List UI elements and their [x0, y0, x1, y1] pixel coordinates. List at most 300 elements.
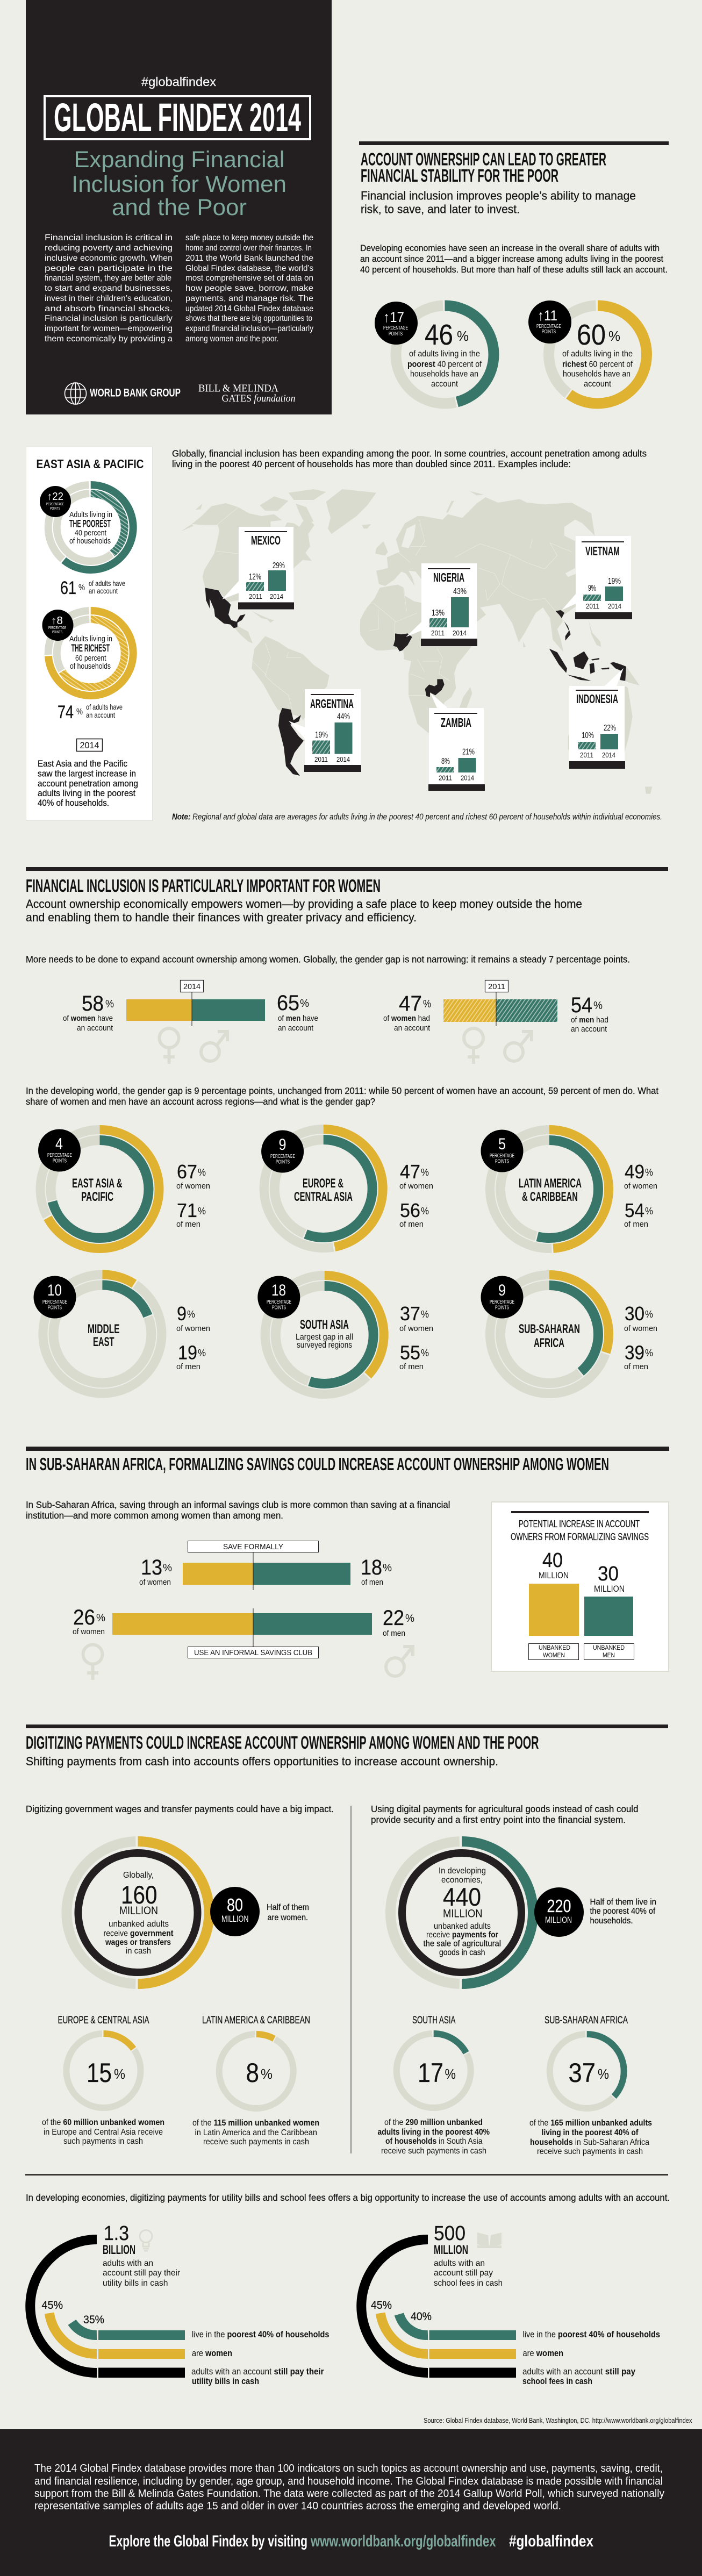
- stat: 60 percent: richest 60 percent of: [562, 360, 633, 369]
- donut label: richest: [69, 634, 112, 671]
- donut label: poorest: THE POOREST: [69, 518, 111, 530]
- caption: adults living in the poorest 40%: [377, 2128, 490, 2137]
- stats: %: [187, 1309, 195, 1320]
- legend labels: live in the poorest 40% of households: [522, 2330, 660, 2339]
- value: %: [261, 2066, 273, 2082]
- region name: EAST: [93, 1335, 114, 1349]
- bars: [112, 1608, 372, 1647]
- label: save formally: [188, 1541, 318, 1552]
- callout: Vietnam: 19%: [608, 577, 621, 586]
- call to action: #globalfindex: [509, 2532, 593, 2550]
- region name: SOUTH ASIA: [300, 1318, 349, 1332]
- caption: [42, 2118, 164, 2146]
- badge: 9 percentage points: PERCENTAGE: [270, 1154, 295, 1160]
- caption: receive such payments in cash: [381, 2146, 486, 2156]
- callout: Indonesia: [569, 668, 625, 769]
- bars: [429, 2330, 516, 2378]
- stat: 46 percent: households have an: [410, 370, 478, 378]
- call to action: Explore the Global Findex by visiting: [109, 2532, 307, 2550]
- stat text: 440 million: MILLION: [443, 1907, 483, 1920]
- stat: 74 percent: %: [76, 706, 83, 717]
- stat: 46 percent: [407, 319, 482, 389]
- stat: 60 percent: [562, 319, 633, 389]
- caption: [529, 2119, 652, 2156]
- stat text: 160 million: [103, 1871, 174, 1956]
- donut: East Asia and Pacific region: [38, 1129, 210, 1248]
- callout: Nigeria: [406, 563, 477, 646]
- callout: Nigeria: NIGERIA: [433, 570, 464, 584]
- value: [246, 2058, 273, 2088]
- stat: women 26: 26: [73, 1606, 95, 1629]
- stat: 1.3 billion: [103, 2222, 181, 2288]
- country shape: Mexico: [205, 588, 246, 628]
- region label: SOUTH ASIA: [412, 2015, 456, 2026]
- stats: of women: [624, 1324, 657, 1333]
- panel note: 40% of households.: [38, 798, 109, 808]
- callout: Argentina: 44%: [337, 712, 350, 721]
- value: %: [114, 2066, 125, 2082]
- region name: [296, 1318, 353, 1350]
- stat: women 26: %: [96, 1612, 105, 1624]
- value: 17: [418, 2058, 443, 2088]
- donut label: poorest: 40 percent: [75, 528, 107, 538]
- tag: unbanked women: [529, 1644, 578, 1660]
- year tag 2014: [76, 739, 102, 752]
- badge: up 11 percentage points: [528, 300, 571, 344]
- badge: 4 percentage points: POINTS: [53, 1158, 67, 1164]
- callout: Zambia: 2011: [439, 774, 452, 782]
- stat: women 13: 13: [141, 1556, 162, 1579]
- paragraph: savings: [26, 1499, 450, 1521]
- region name: EAST ASIA &: [72, 1176, 123, 1191]
- stats: 67: [177, 1161, 197, 1183]
- legend labels: adults with an account still pay: [522, 2367, 636, 2377]
- intro text column 1: Financial inclusion is particularly: [45, 314, 173, 323]
- stat: men 18: [361, 1556, 392, 1587]
- paragraph: gender gap: More needs to be done to expand account ownership among women. Globally, the gender gap is not narrowing: it remains a steady 7 percentage points.: [26, 954, 630, 964]
- intro text column 2: expand financial inclusion—particularly: [185, 324, 313, 333]
- paragraph: developing economies: 40 percent of households. But more than half of these adults still lack an account.: [360, 264, 668, 275]
- callout: Vietnam: 2011: [586, 602, 599, 610]
- intro: globally: [172, 448, 647, 469]
- stat: 60 percent: households have an: [563, 370, 631, 378]
- section rule: Sub-Saharan savings: [26, 1447, 669, 1451]
- stat: women 47: of women had: [383, 1014, 430, 1023]
- tag: unbanked men: [584, 1644, 634, 1660]
- stat: men 54: [571, 993, 608, 1034]
- callout: Indonesia: 2011: [580, 751, 593, 759]
- subheading: women: Account ownership economically empowers women—by providing a safe place to keep money outside the home: [26, 897, 582, 911]
- donut: Sub-Saharan Africa: [481, 1275, 657, 1393]
- callout: Zambia: ZAMBIA: [441, 715, 471, 729]
- stat: 46 percent: %: [457, 328, 469, 344]
- country shape: Vietnam: [555, 610, 571, 641]
- stat: women 58: %: [105, 998, 114, 1010]
- panel title: OWNERS FROM FORMALIZING SAVINGS: [511, 1532, 649, 1542]
- region name: [519, 1176, 582, 1204]
- title: GLOBAL FINDEX 2014: [54, 95, 301, 140]
- bar: unbanked women 40 million: MILLION: [539, 1570, 569, 1580]
- note: half poorest: the poorest 40% of: [590, 1907, 656, 1916]
- stats: [624, 1161, 657, 1229]
- callout: Nigeria: 43%: [453, 587, 467, 596]
- heading: women: FINANCIAL INCLUSION IS PARTICULARLY IMPORTANT FOR WOMEN: [26, 876, 381, 896]
- stat: men 18: 18: [361, 1556, 382, 1579]
- stat: 500 million: account still pay: [434, 2269, 493, 2278]
- badge: up 8: ↑8: [51, 615, 63, 627]
- donut: Latin America and Caribbean: [481, 1130, 657, 1248]
- caption: in Latin America and the Caribbean: [195, 2128, 317, 2137]
- panel: footer: [0, 2429, 702, 2576]
- badge: 18 percentage points: POINTS: [272, 1305, 286, 1311]
- intro text column 2: Global Findex database, the world’s: [185, 264, 313, 273]
- stats: 54: [625, 1199, 644, 1221]
- region name: AFRICA: [534, 1336, 564, 1350]
- bar: unbanked women 40 million: [529, 1549, 579, 1636]
- donut: Sub-Saharan Africa 37 percent: [529, 2015, 652, 2156]
- section rule: women: [26, 867, 668, 871]
- stats: %: [645, 1206, 653, 1217]
- badge: up 11 percentage points: PERCENTAGE: [536, 324, 561, 330]
- subheading: women: and enabling them to handle their finances with greater privacy and efficiency.: [26, 911, 417, 924]
- stats: 55: [400, 1342, 420, 1363]
- chart: school fees: [361, 2222, 660, 2386]
- paragraph: agricultural goods: Using digital payments for agricultural goods instead of cash could: [371, 1804, 639, 1814]
- caption: such payments in cash: [63, 2137, 143, 2146]
- paragraph: agricultural goods: provide security and a first entry point into the financial system.: [371, 1814, 626, 1825]
- stat text: 440 million: 440: [443, 1883, 481, 1911]
- bar chart: informal savings club: [73, 1606, 414, 1680]
- stat: 74 percent: of adults have: [86, 703, 123, 711]
- stats: [624, 1303, 657, 1371]
- stat: 46 percent: account: [431, 380, 458, 389]
- arcs and bars: [361, 2239, 428, 2373]
- intro text column 2: home and control over their finances. In: [185, 244, 312, 253]
- intro text column 2: [185, 233, 313, 344]
- badge: up 22: PERCENTAGE: [46, 502, 64, 506]
- note: half poorest: [590, 1898, 656, 1926]
- icon: book: [477, 2232, 502, 2248]
- caption: of the 60 million unbanked women: [42, 2118, 164, 2127]
- stats: 56: [400, 1199, 420, 1221]
- panel: intro dark: [26, 0, 332, 414]
- callout: Argentina: 19%: [315, 731, 328, 740]
- badge: 18 percentage points: PERCENTAGE: [267, 1299, 291, 1305]
- caption: of households in South Asia: [385, 2137, 483, 2146]
- stat: men 65: 65: [277, 991, 299, 1015]
- stat: women 13: of women: [139, 1578, 171, 1587]
- panel note: [38, 759, 138, 808]
- badge: 9 percentage points: 9: [498, 1282, 506, 1299]
- donut: 60 percent richest: [549, 305, 647, 403]
- intro text column 2: safe place to keep money outside the: [185, 233, 313, 242]
- callout: Argentina: ARGENTINA: [310, 697, 354, 711]
- bars 2011: [443, 992, 557, 1026]
- subheading: account ownership: risk, to save, and later to invest.: [361, 202, 520, 216]
- callout: Argentina: 2014: [336, 755, 350, 763]
- caption: of the 115 million unbanked women: [192, 2119, 319, 2128]
- value: 35 percent poorest: 35%: [83, 2314, 104, 2326]
- stat: men 65: an account: [278, 1024, 314, 1033]
- heading: account ownership: [361, 149, 606, 185]
- stat: 74 percent: [58, 702, 123, 722]
- subheading: digitizing: Shifting payments from cash into accounts offers opportunities to increase account ownership.: [26, 1755, 498, 1768]
- stats: %: [198, 1348, 206, 1358]
- value: 45 percent women: 45%: [42, 2299, 63, 2312]
- callout: Vietnam: 2014: [608, 602, 621, 610]
- icon: female symbol: [83, 1645, 102, 1680]
- region name: MIDDLE: [88, 1322, 119, 1336]
- bars 2014: [126, 992, 265, 1026]
- intro text column 1: inclusive economic growth. When: [45, 254, 173, 263]
- stats: of women: [176, 1182, 210, 1191]
- paragraph: agricultural goods: [371, 1804, 639, 1825]
- badge: 10 percentage points: POINTS: [48, 1305, 62, 1311]
- region name: [519, 1322, 580, 1350]
- stat: women 26: of women: [73, 1627, 105, 1636]
- donut label: poorest: Adults living in: [69, 510, 112, 519]
- callout: Mexico: 29%: [273, 561, 285, 570]
- badge: 5 percentage points: POINTS: [495, 1159, 509, 1164]
- caption: living in the poorest 40% of: [542, 2128, 639, 2137]
- intro text column 2: updated 2014 Global Findex database: [185, 304, 313, 313]
- stat: 60 percent: 60: [577, 319, 606, 351]
- stat: women 26: [73, 1606, 105, 1636]
- legend labels: adults with an account still pay their: [191, 2367, 324, 2377]
- stat: women 47: 47: [399, 992, 422, 1015]
- badge: 10 percentage points: PERCENTAGE: [42, 1299, 67, 1305]
- badge: 80 million: [210, 1887, 260, 1936]
- intro: globally: living in the poorest 40 percent of households has more than doubled since 2011. Examples include:: [172, 459, 571, 469]
- region name: [72, 1176, 123, 1204]
- caption: receive such payments in cash: [537, 2147, 643, 2156]
- tag: unbanked men: UNBANKED: [593, 1644, 625, 1651]
- stat: 60 percent: of adults living in the: [562, 349, 633, 359]
- tag 2014: 2014: [183, 982, 200, 991]
- call to action: [109, 2532, 593, 2550]
- stat: men 18: %: [383, 1562, 392, 1574]
- stat: 500 million: adults with an: [434, 2259, 485, 2268]
- stats: of women: [399, 1182, 433, 1191]
- callout: Indonesia: 2014: [602, 751, 615, 759]
- legend labels: [522, 2330, 660, 2386]
- icon: World Bank globe logo: [65, 383, 86, 404]
- stats: %: [421, 1206, 429, 1217]
- region name: SUB-SAHARAN: [519, 1322, 580, 1336]
- panel title: [511, 1519, 649, 1542]
- value: 37: [569, 2058, 596, 2088]
- legend labels: [191, 2330, 329, 2386]
- stats: [176, 1303, 210, 1371]
- value: 15: [87, 2058, 112, 2088]
- paragraph: developing world: [26, 1085, 658, 1107]
- badge: 10 percentage points: [33, 1276, 76, 1318]
- bar chart: save formally: [139, 1541, 392, 1590]
- region name: & CARIBBEAN: [522, 1190, 578, 1204]
- intro text column 1: [45, 233, 173, 344]
- bar: unbanked men 30 million: [584, 1563, 633, 1636]
- stats: 49: [625, 1161, 644, 1183]
- panel note: account penetration among: [38, 779, 138, 789]
- donut label: richest: Adults living in: [69, 634, 112, 643]
- call to action: www.worldbank.org/globalfindex: [310, 2532, 496, 2550]
- region name: LATIN AMERICA: [519, 1176, 582, 1191]
- Gates Foundation wordmark: GATES foundation: [221, 393, 296, 404]
- stat: 500 million: school fees in cash: [434, 2279, 503, 2288]
- stat: women 13: %: [163, 1562, 172, 1574]
- callout: Nigeria: 13%: [432, 609, 445, 618]
- stat: 46 percent: of adults living in the: [409, 349, 480, 359]
- note: half women: [267, 1903, 309, 1922]
- badge: 10 percentage points: 10: [47, 1282, 62, 1299]
- country shape: Zambia: [425, 679, 445, 697]
- subtitle: [71, 147, 286, 220]
- region label: LATIN AMERICA & CARIBBEAN: [202, 2015, 310, 2026]
- stats: 47: [400, 1161, 420, 1183]
- callout: Argentina: [289, 689, 361, 772]
- tag 2011: 2011: [488, 982, 505, 991]
- stat text: 160 million: 160: [121, 1880, 157, 1909]
- note: half poorest: households.: [590, 1916, 633, 1926]
- caption: in Europe and Central Asia receive: [44, 2128, 163, 2137]
- badge: 5 percentage points: 5: [498, 1135, 506, 1153]
- stat: 1.3 billion: utility bills in cash: [103, 2279, 168, 2288]
- intro text column 2: 2011 the World Bank launched the: [185, 254, 313, 263]
- panel note: adults living in the poorest: [38, 789, 135, 798]
- section rule: account ownership: [359, 141, 669, 145]
- stat: women 47: an account: [394, 1024, 431, 1033]
- legend labels: school fees in cash: [522, 2377, 592, 2386]
- world map: [181, 489, 652, 794]
- intro text column 1: to start and expand businesses,: [45, 284, 173, 293]
- stats: 9: [177, 1303, 187, 1325]
- badge: 80 million: MILLION: [221, 1914, 248, 1924]
- badge: 18 percentage points: [257, 1276, 300, 1318]
- icon: male symbol: [201, 1032, 227, 1061]
- stats: of men: [399, 1220, 424, 1229]
- icon: light bulb: [140, 2230, 152, 2251]
- caption: households in Sub-Saharan Africa: [530, 2138, 649, 2147]
- stat text: 440 million: unbanked adults: [434, 1922, 491, 1931]
- stat: men 22: of men: [383, 1629, 405, 1638]
- intro text column 2: payments, and manage risk. The: [185, 294, 313, 303]
- stats: 19: [178, 1342, 197, 1363]
- note: half women: Half of them: [267, 1903, 309, 1912]
- region name: CENTRAL ASIA: [294, 1190, 353, 1204]
- paragraph: utility bills and school fees: In developing economies, digitizing payments for utility bills and school fees offers a big opportunity to increase the use of accounts among adults with an account.: [26, 2192, 670, 2203]
- footer paragraph: [34, 2463, 664, 2512]
- panel: East Asia and Pacific: [26, 447, 153, 820]
- intro text column 2: how people save, borrow, make: [185, 284, 313, 293]
- stat text: 440 million: [424, 1866, 501, 1957]
- callout: Zambia: 21%: [462, 747, 475, 757]
- stats: of women: [399, 1324, 433, 1333]
- tag: unbanked men: MEN: [603, 1651, 615, 1659]
- label: save formally: SAVE FORMALLY: [223, 1542, 283, 1551]
- donut: richest 74 vs 66: [48, 611, 133, 696]
- stats: [399, 1303, 433, 1371]
- stat text: 160 million: unbanked adults: [109, 1920, 169, 1929]
- Gates Foundation wordmark: [198, 383, 296, 404]
- stat text: 160 million: MILLION: [119, 1905, 158, 1917]
- tag: unbanked women: WOMEN: [543, 1651, 565, 1659]
- callout: Vietnam: 9%: [588, 584, 596, 593]
- region name: surveyed regions: [297, 1341, 352, 1350]
- donut: Latin America and Caribbean 8 percent: [192, 2015, 319, 2146]
- donut: Europe and Central Asia 15 percent: [42, 2015, 164, 2146]
- bar chart: 2014 gender: [63, 981, 318, 1064]
- badge: up 11 percentage points: ↑11: [538, 307, 557, 324]
- country shape: Nigeria: [393, 633, 412, 652]
- stat: 60 percent: account: [584, 380, 611, 389]
- stats: %: [421, 1309, 429, 1320]
- intro text column 1: and absorb financial shocks.: [45, 304, 173, 313]
- tag 2014: [181, 981, 203, 992]
- intro text column 1: them economically by providing a: [45, 334, 173, 344]
- stat: men 65: [277, 991, 318, 1033]
- stats: of men: [176, 1220, 200, 1229]
- icon: female symbol: [464, 1028, 483, 1064]
- donut: 440 million: [390, 1842, 533, 1984]
- section rule: bills and fees: [25, 2174, 668, 2176]
- donut: South Asia: [257, 1275, 433, 1394]
- tag 2011: [485, 981, 508, 992]
- panel note: saw the largest increase in: [38, 769, 136, 778]
- badge: 5 percentage points: PERCENTAGE: [490, 1153, 514, 1159]
- chart: utility bills: [30, 2222, 329, 2386]
- caption: [192, 2119, 319, 2146]
- subtitle: Inclusion for Women: [71, 171, 286, 197]
- intro: globally: Globally, financial inclusion has been expanding among the poor. In some countries, account penetration among adults: [172, 448, 647, 459]
- badge: 5 percentage points: [481, 1130, 524, 1172]
- stat: 74 percent: 74: [58, 702, 74, 722]
- stat: women 58: an account: [77, 1024, 113, 1033]
- stat text: 440 million: receive payments for: [426, 1930, 498, 1940]
- paragraph: developing economies: [360, 243, 668, 275]
- region name: [294, 1176, 353, 1204]
- caption: of the 290 million unbanked: [384, 2118, 483, 2127]
- footer paragraph: and financial resilience, including by gender, age group, and household income. The Global Findex database is made possible with financial: [34, 2475, 663, 2487]
- value: 8: [246, 2058, 259, 2088]
- badge: 4 percentage points: 4: [55, 1135, 63, 1153]
- stat: men 54: 54: [571, 993, 592, 1017]
- stats: of men: [624, 1220, 648, 1229]
- paragraph: developing world: share of women and men have an account across regions—and what is the gender gap?: [26, 1096, 375, 1107]
- bar: unbanked women 40 million: 40: [542, 1549, 563, 1572]
- intro text column 1: Financial inclusion is critical in: [45, 233, 173, 242]
- donut: 160 million: [67, 1842, 209, 1984]
- stat: 500 million: [434, 2222, 503, 2288]
- stat: 60 percent: %: [608, 328, 620, 344]
- stat: men 54: of men had: [571, 1015, 608, 1025]
- callout: Mexico: 2011: [249, 592, 262, 600]
- stat text: 440 million: economies,: [441, 1876, 483, 1885]
- stats: %: [645, 1309, 653, 1320]
- bars: [98, 2330, 185, 2378]
- intro text column 1: reducing poverty and achieving: [45, 244, 173, 253]
- callout: Vietnam: VIETNAM: [585, 544, 620, 558]
- callout: Nigeria: 2014: [453, 629, 467, 637]
- stat text: 440 million: In developing: [439, 1866, 486, 1876]
- badge: 80 million: 80: [227, 1895, 243, 1915]
- stats: of women: [176, 1324, 210, 1333]
- region name: PACIFIC: [81, 1190, 113, 1204]
- region label: EUROPE & CENTRAL ASIA: [58, 2015, 149, 2026]
- stat: men 65: of men have: [278, 1014, 318, 1023]
- donut: South Asia 17 percent: [377, 2015, 490, 2156]
- paragraph: savings: institution—and more common among women than among men.: [26, 1510, 283, 1521]
- donut label: poorest: of households: [69, 536, 111, 546]
